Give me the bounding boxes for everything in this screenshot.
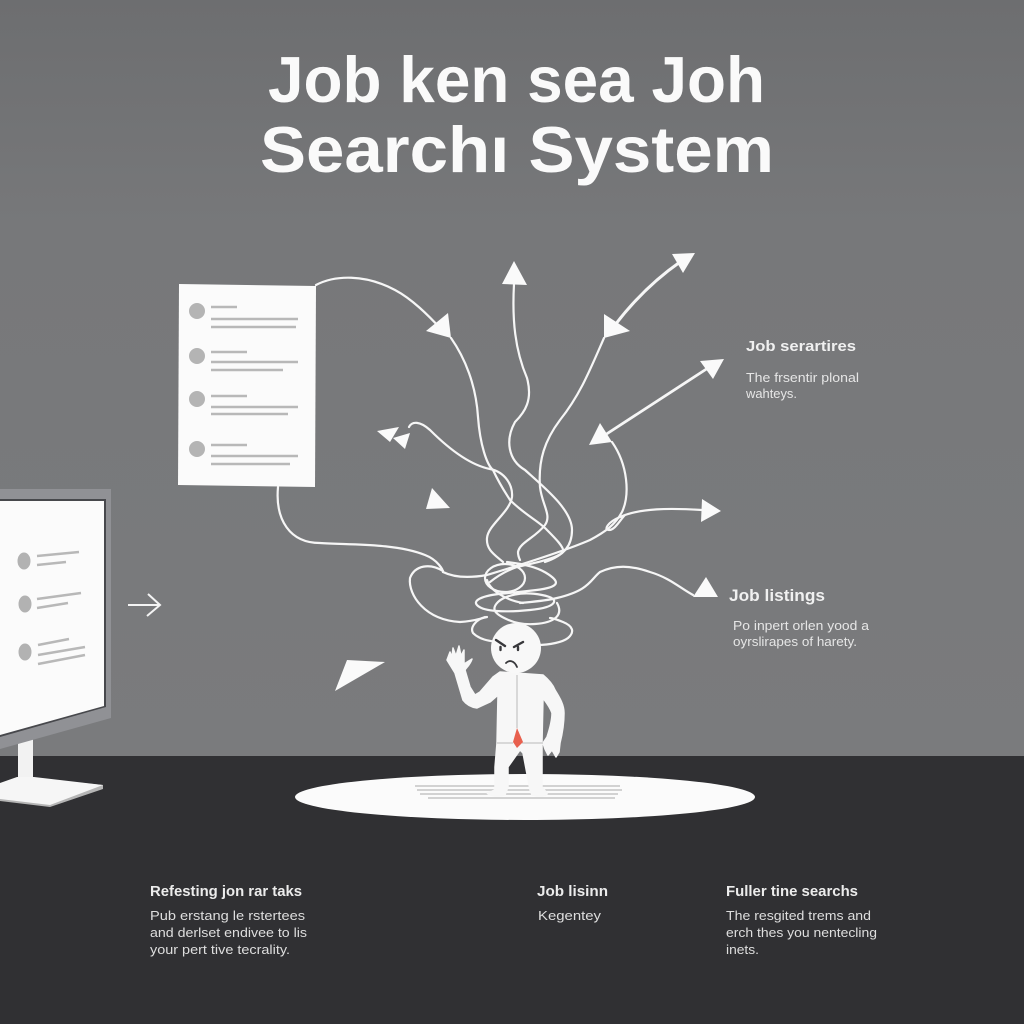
title: Searchı System [260, 113, 774, 186]
arrow: monitor to document [128, 594, 160, 616]
bottom text: column 1: Pub erstang le rstertees [150, 909, 305, 923]
callout: job searches [745, 339, 859, 401]
bottom text: column 2 [537, 884, 608, 923]
callout: job listings: Job listings [729, 587, 825, 605]
title: Job ken sea Joh [268, 43, 765, 116]
angry face [496, 640, 523, 667]
bottom text: column 1 [150, 884, 307, 957]
body silhouette [447, 646, 564, 796]
background wall [0, 0, 1024, 756]
arrowheads [335, 253, 724, 691]
bottom text: column 3: The resgited trems and [726, 909, 871, 923]
bottom text: column 2: Job lisinn [537, 884, 608, 900]
title [260, 43, 774, 186]
document panel [178, 284, 316, 487]
red tie [513, 728, 523, 748]
floor scribble lines [415, 786, 622, 798]
frustrated person [447, 623, 564, 796]
bottom text: column 3: Fuller tine searchs [726, 884, 858, 900]
head [491, 623, 541, 673]
callout: job listings: oyrslirapes of harety. [733, 635, 857, 649]
callout: job searches: The frsentir plonal [746, 371, 859, 385]
dark floor [0, 756, 1024, 1024]
bottom text: column 3 [726, 884, 877, 957]
shirt lines [497, 675, 543, 743]
bottom text: column 2: Kegentey [538, 909, 602, 923]
callout: job searches: wahteys. [745, 387, 797, 401]
monitor [0, 489, 111, 807]
bottom text: column 1: Refesting jon rar taks [150, 884, 302, 900]
tangled arrows [278, 262, 708, 645]
callout: job listings: Po inpert orlen yood a [733, 619, 869, 633]
bottom text: column 3: erch thes you nentecling [726, 926, 877, 940]
spotlight ellipse [295, 774, 755, 820]
bottom text: column 3: inets. [726, 943, 759, 957]
bottom text: column 1: and derlset endivee to lis [150, 926, 307, 940]
callout: job searches: Job serartires [746, 339, 856, 355]
callout: job listings [729, 587, 869, 649]
bottom text: column 1: your pert tive tecrality. [150, 943, 290, 957]
